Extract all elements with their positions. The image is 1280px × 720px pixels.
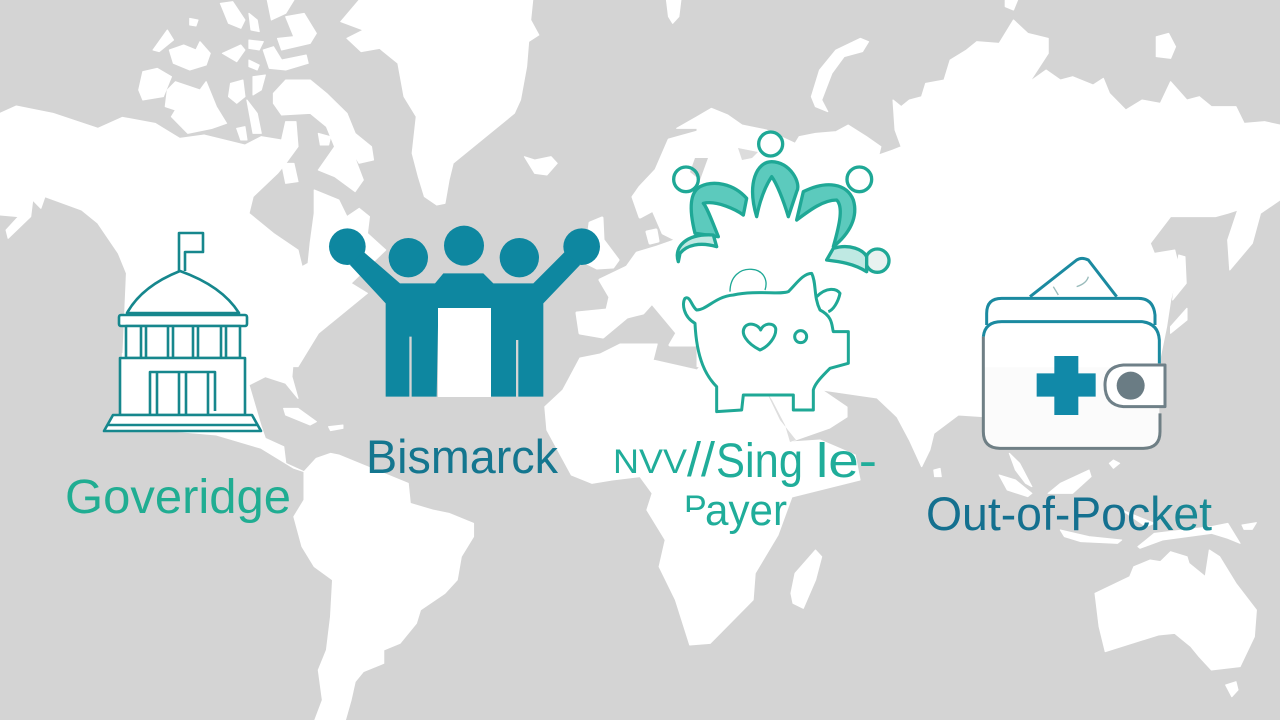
icon: crown of people <box>674 132 889 272</box>
icon: group of people with raised arms <box>329 226 600 397</box>
icon: piggy bank with heart <box>683 269 848 412</box>
landmass: South Asia and Arabia <box>701 353 983 477</box>
label: Single-Payer: P <box>684 489 707 527</box>
label: Out-of-Pocket: Out-of-Pocket <box>926 487 1212 540</box>
label: Bismarck: Bismarck <box>366 430 558 483</box>
label: Single-Payer: le- <box>816 435 877 488</box>
label: Single-Payer: // <box>687 434 716 487</box>
label: Single-Payer: NVV <box>613 443 687 481</box>
seas: Baltic inlets and Red Sea <box>690 148 796 442</box>
label: Goveridge: Goveridge <box>65 471 291 524</box>
landmass: North America and Arctic islands <box>0 0 386 367</box>
label: Single-Payer: ayer <box>705 486 787 535</box>
landmass: Southeast Asia and Indonesia <box>999 453 1256 548</box>
landmass: Greenland and Iceland <box>341 0 557 205</box>
label: Single-Payer: Sing <box>716 435 803 488</box>
landmass: Africa <box>545 343 860 645</box>
landmass: Australia and Tasmania <box>1095 550 1256 697</box>
landmass: Eurasia <box>667 0 1280 367</box>
icon: government building <box>104 233 261 431</box>
label: Single-Payer <box>613 434 877 535</box>
icon: wallet with medical cross <box>983 258 1165 448</box>
landmass: Madagascar <box>791 550 822 608</box>
landmass: South America <box>294 453 473 720</box>
landmass: continental Europe <box>577 130 705 345</box>
landmass: Britain and Ireland <box>585 218 658 268</box>
landmass: Central America <box>122 353 343 472</box>
gap between people <box>438 308 491 397</box>
